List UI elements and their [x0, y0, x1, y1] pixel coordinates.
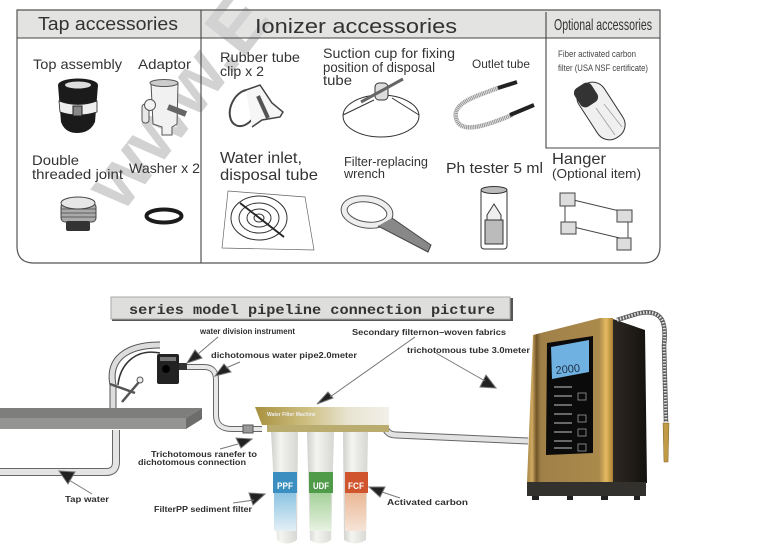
item: top assembly	[33, 56, 122, 133]
item: fiber activated carbon filter: filter (USA NSF certificate)	[558, 63, 648, 73]
item: rubber tube clip: clip x 2	[220, 63, 264, 79]
item: filter-replacing wrench: wrench	[343, 166, 385, 181]
heading: optional accessories: Optional accessories	[554, 17, 652, 34]
item: fiber activated carbon filter: Fiber activated carbon	[558, 49, 636, 59]
item: double threaded joint: Double	[32, 152, 79, 168]
label: trichotomous tube: trichotomous tube 3.0meter	[407, 346, 530, 355]
arrow: dichotomous water pipe	[215, 362, 240, 376]
spout tip	[663, 423, 669, 462]
item: water inlet, disposal tube	[220, 150, 318, 250]
arrow: trichotomous transfer	[220, 438, 252, 449]
control panel	[546, 336, 593, 455]
panel: pipeline title banner: series model pipeline connection picture	[129, 303, 495, 319]
item: suction cup: tube	[323, 72, 352, 88]
tap water pipe	[0, 430, 116, 472]
item: suction cup	[323, 45, 455, 137]
item: outlet tube: Outlet tube	[472, 57, 530, 71]
machine front	[527, 318, 613, 483]
labels and arrows	[59, 327, 530, 514]
control buttons	[578, 393, 586, 451]
panel: pipeline title banner	[111, 297, 513, 321]
item: top assembly: Top assembly	[33, 56, 122, 72]
arrow: tap water	[59, 471, 92, 494]
arrow: secondary filter	[317, 337, 415, 404]
arrow: filterpp sediment filter	[233, 493, 265, 505]
item: fiber activated carbon filter	[558, 49, 648, 145]
item: double threaded joint: threaded joint	[32, 166, 123, 182]
item: ph tester: Ph tester 5 ml	[446, 160, 543, 177]
item: ph tester	[446, 160, 543, 249]
label: dichotomous water pipe: dichotomous water pipe2.0meter	[211, 351, 357, 360]
item: suction cup: Suction cup for fixing	[323, 45, 455, 61]
arrow: trichotomous tube	[436, 353, 496, 388]
label: water division instrument: water division instrument	[199, 327, 295, 336]
lcd screen	[551, 340, 589, 379]
item: hanger: Hanger	[552, 151, 607, 168]
item: washer: Washer x 2	[129, 160, 200, 176]
filter unit: Water Filter Machine	[267, 412, 316, 418]
item: suction cup: position of disposal	[323, 59, 435, 75]
item: water inlet, disposal tube: disposal tube	[220, 167, 318, 184]
item: water inlet, disposal tube: Water inlet,	[220, 150, 302, 167]
arrow: water division instrument	[187, 337, 218, 363]
item: adaptor: Adaptor	[138, 56, 191, 72]
header band	[17, 10, 660, 38]
item: outlet tube	[456, 57, 534, 127]
item: filter-replacing wrench	[342, 154, 431, 252]
filter unit	[255, 407, 389, 544]
filter UDF: UDF	[313, 481, 329, 491]
sink counter	[0, 408, 202, 429]
machine feet	[532, 496, 640, 500]
label: secondary filter: Secondary filternon−woven fabrics	[352, 328, 507, 337]
item: filter-replacing wrench: Filter-replacing	[344, 154, 428, 169]
item: adaptor	[138, 56, 191, 135]
machine base	[527, 482, 646, 496]
spout hose	[617, 312, 666, 422]
arrow: activated carbon	[369, 487, 400, 498]
lcd screen: 2000	[555, 362, 581, 377]
label: tap water: Tap water	[65, 495, 109, 504]
item: double threaded joint	[32, 152, 123, 231]
item: washer	[129, 160, 200, 222]
heading: ionizer accessories: Ionizer accessories	[255, 16, 457, 38]
control labels	[554, 387, 572, 448]
filter cap	[255, 407, 389, 425]
outlet pipe to ionizer	[384, 424, 528, 441]
item: hanger: (Optional item)	[552, 166, 641, 181]
dichotomous pipe	[187, 367, 262, 429]
filter FCF: FCF	[348, 481, 364, 491]
machine side	[613, 319, 647, 483]
label: filterpp sediment filter: FilterPP sediment filter	[154, 505, 252, 514]
item: rubber tube clip: Rubber tube	[220, 49, 300, 65]
panel: accessories table	[17, 0, 660, 263]
ionizer machine	[527, 312, 669, 500]
label: activated carbon: Activated carbon	[387, 498, 468, 507]
item: hanger	[552, 151, 641, 250]
icon: water division instrument	[157, 354, 187, 384]
icon: faucet	[110, 345, 160, 408]
heading: tap accessories: Tap accessories	[38, 14, 178, 34]
item: rubber tube clip	[220, 49, 300, 131]
label: trichotomous transfer: Trichotomous ranefer to	[151, 450, 257, 459]
label: trichotomous transfer: dichotomous connection	[138, 458, 246, 467]
filter PPF: PPF	[277, 481, 293, 491]
